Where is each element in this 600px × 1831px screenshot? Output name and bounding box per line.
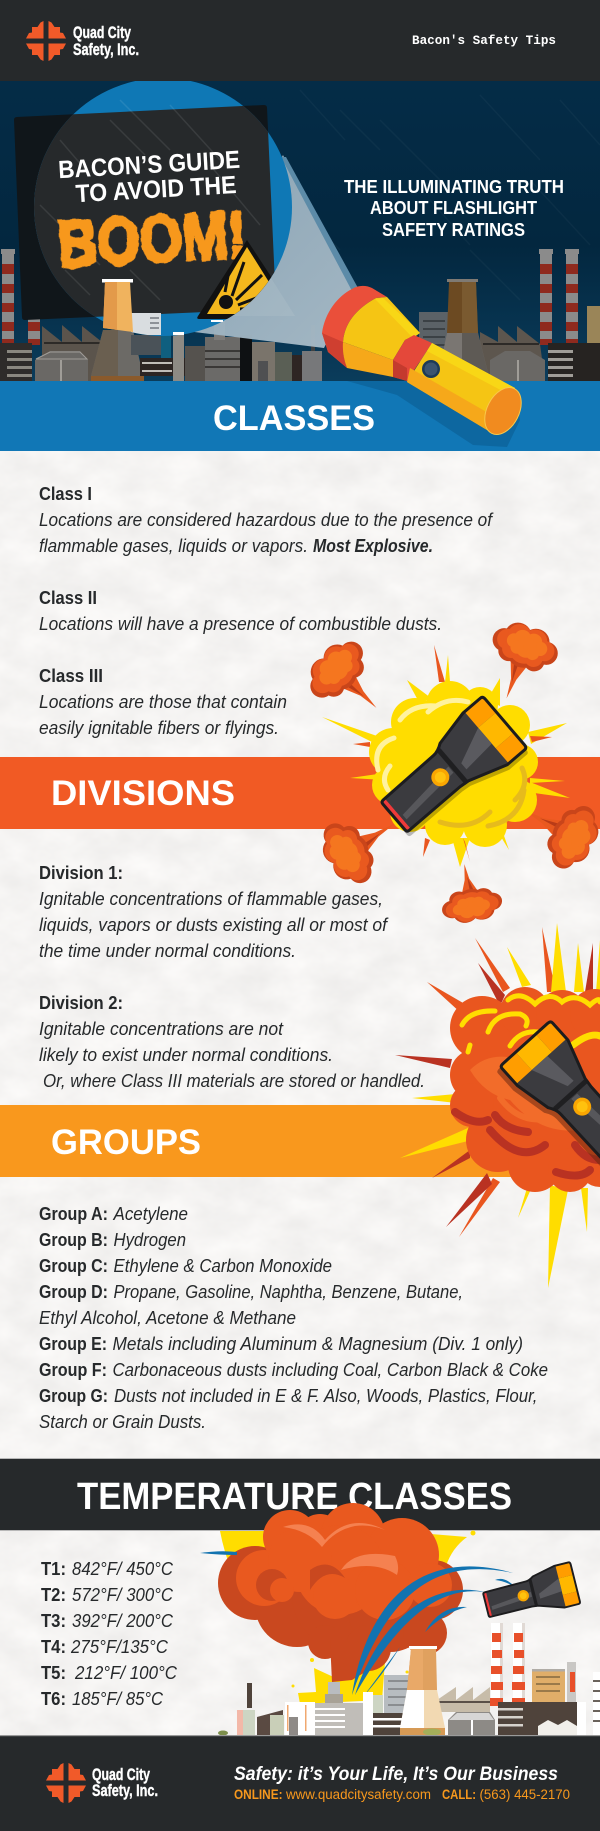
temperature text block: 842°F/ 450°C	[72, 1559, 174, 1579]
temperature text block: 275°F/135°C	[70, 1637, 169, 1657]
icon: explosive warning triangle	[197, 240, 272, 319]
striped chimneys	[490, 1623, 525, 1706]
footer contact line: (563) 445-2170	[480, 1787, 570, 1802]
ghost warning sign in beam	[199, 240, 295, 316]
temperature text block: T2:	[41, 1585, 66, 1605]
hero subtitle: ABOUT FLASHLIGHT	[370, 198, 537, 218]
billboard sign, lit part	[14, 100, 276, 335]
group text block: Propane, Gasoline, Naphtha, Benzene, Butane,	[114, 1282, 463, 1302]
group text block: Starch or Grain Dusts.	[39, 1412, 206, 1432]
explosion 2 with flashlight	[395, 923, 600, 1288]
blue swooshes	[200, 1551, 515, 1697]
division text block: liquids, vapors or dusts existing all or most of	[39, 915, 389, 935]
header tagline: Bacon's Safety Tips	[412, 34, 556, 48]
spikes	[322, 655, 570, 867]
footer slogan: Safety: it’s Your Life, It’s Our Business	[234, 1764, 558, 1785]
footer company name: Safety, Inc.	[92, 1781, 158, 1800]
division text block: the time under normal conditions.	[39, 941, 296, 961]
divisions heading: DIVISIONS	[51, 774, 235, 813]
class text block	[39, 484, 494, 738]
headline on sign: BACON’S GUIDE	[57, 146, 241, 184]
class text block: Locations are considered hazardous due to the presence of	[39, 510, 494, 530]
flashlight shadow	[496, 1026, 600, 1180]
orange cloud	[450, 987, 600, 1192]
group text block: Group A:	[39, 1204, 108, 1224]
highlights and shadows	[377, 700, 525, 826]
class text block: easily ignitable fibers or flyings.	[39, 718, 279, 738]
billboard sign, unlit part	[14, 105, 276, 320]
footer bar	[0, 1735, 600, 1831]
temperature text block: T5:	[41, 1663, 66, 1683]
groups band	[0, 1105, 600, 1177]
company name: Safety, Inc.	[73, 40, 139, 59]
hero subtitle: SAFETY RATINGS	[382, 220, 525, 240]
footer contact line: CALL:	[442, 1787, 476, 1802]
city skyline left	[0, 249, 322, 381]
temperature text block: T6:	[41, 1689, 66, 1709]
division text block: Division 1:	[39, 863, 123, 883]
division text block: Ignitable concentrations are not	[39, 1019, 284, 1039]
class text block: Class III	[39, 666, 103, 686]
flashlight beam	[194, 155, 352, 348]
group text block: Group D:	[39, 1282, 108, 1302]
cooling tower	[400, 1646, 445, 1735]
group text block: Ethyl Alcohol, Acetone & Methane	[39, 1308, 296, 1328]
mushroom cloud explosion	[200, 1503, 580, 1704]
lower cloud light lobes	[470, 1050, 580, 1131]
company name	[73, 23, 139, 59]
footer company name: Quad City	[92, 1765, 150, 1784]
yellow burst	[220, 1530, 476, 1704]
icon: footer logo mark	[46, 1763, 86, 1803]
temperature text block: 572°F/ 300°C	[72, 1585, 174, 1605]
class text block: Class II	[39, 588, 97, 608]
division text block: Ignitable concentrations of flammable gases,	[39, 889, 383, 909]
yellow flashlight	[322, 286, 529, 441]
hero panel	[0, 78, 600, 381]
dark cloud lobes	[218, 1540, 463, 1682]
dark flashlight	[500, 1021, 600, 1175]
group text block: Acetylene	[113, 1204, 188, 1224]
divisions band	[0, 757, 600, 829]
group text block: Metals including Aluminum & Magnesium (Div. 1 only)	[112, 1334, 523, 1354]
class text block: Locations will have a presence of combustible dusts.	[39, 614, 442, 634]
spotlight circle	[34, 78, 292, 336]
division text block: Division 2:	[39, 993, 123, 1013]
group text block: Dusts not included in E & F. Also, Woods, Plastics, Flour,	[114, 1386, 538, 1406]
group text block: Hydrogen	[114, 1230, 186, 1250]
temperature band	[0, 1458, 600, 1531]
class text block: Locations are those that contain	[39, 692, 287, 712]
division text block: likely to exist under normal conditions.	[39, 1045, 333, 1065]
temperature heading: TEMPERATURE CLASSES	[77, 1476, 512, 1518]
yellow cloud	[369, 681, 538, 847]
group text block: Group G:	[39, 1386, 108, 1406]
company name: Quad City	[73, 23, 131, 42]
division text block	[39, 863, 425, 1091]
footer contact line: ONLINE:	[234, 1787, 282, 1802]
classes heading: CLASSES	[213, 399, 375, 438]
dark flashlight	[372, 696, 527, 843]
paper background	[0, 451, 600, 1736]
headline on sign: TO AVOID THE	[75, 171, 237, 208]
hero subtitle	[344, 177, 564, 240]
classes band (behind flashlight)	[0, 381, 600, 451]
group text block: Group E:	[39, 1334, 107, 1354]
flashlight shadow	[347, 381, 520, 447]
spikes	[427, 927, 556, 1237]
lit cooling tower	[102, 279, 223, 335]
group text block: Group F:	[39, 1360, 107, 1380]
header bar	[0, 0, 600, 81]
temperature text block: 212°F/ 100°C	[74, 1663, 178, 1683]
BOOM title: BOOM!	[56, 197, 248, 281]
flying flashlight	[481, 1562, 580, 1626]
cloud curls	[256, 1523, 398, 1602]
footer contact line: www.quadcitysafety.com	[285, 1787, 431, 1802]
dark flashlight shadow	[374, 701, 529, 848]
group text block: Group B:	[39, 1230, 108, 1250]
headline on sign	[59, 150, 240, 202]
group text block	[39, 1204, 548, 1432]
hero subtitle: THE ILLUMINATING TRUTH	[344, 177, 564, 197]
icon: company logo mark	[26, 21, 66, 61]
bright cloud lobes	[236, 1503, 452, 1620]
group text block: Group C:	[39, 1256, 108, 1276]
temperature text block: T1:	[41, 1559, 66, 1579]
temperature text block: T3:	[41, 1611, 66, 1631]
temperature text block	[41, 1559, 178, 1709]
class text block: flammable gases, liquids or vapors.	[39, 536, 308, 556]
division text block: Or, where Class III materials are stored or handled.	[43, 1071, 425, 1091]
rain streaks	[300, 90, 600, 300]
class text block: Class I	[39, 484, 92, 504]
footer contact line	[234, 1787, 570, 1802]
temperature text block: T4:	[41, 1637, 66, 1657]
groups heading: GROUPS	[51, 1123, 201, 1162]
small mushroom clouds	[298, 631, 399, 733]
factory skyline bottom	[218, 1623, 600, 1736]
group text block: Ethylene & Carbon Monoxide	[114, 1256, 332, 1276]
city skyline right	[419, 249, 600, 381]
temperature text block: 185°F/ 85°C	[72, 1689, 164, 1709]
class text block: Most Explosive.	[313, 536, 433, 556]
footer company name	[92, 1765, 158, 1800]
explosion 1 with flashlight	[298, 614, 600, 926]
group text block: Carbonaceous dusts including Coal, Carbon Black & Coke	[112, 1360, 548, 1380]
temperature text block: 392°F/ 200°C	[72, 1611, 174, 1631]
cloud arcs	[455, 996, 600, 1176]
